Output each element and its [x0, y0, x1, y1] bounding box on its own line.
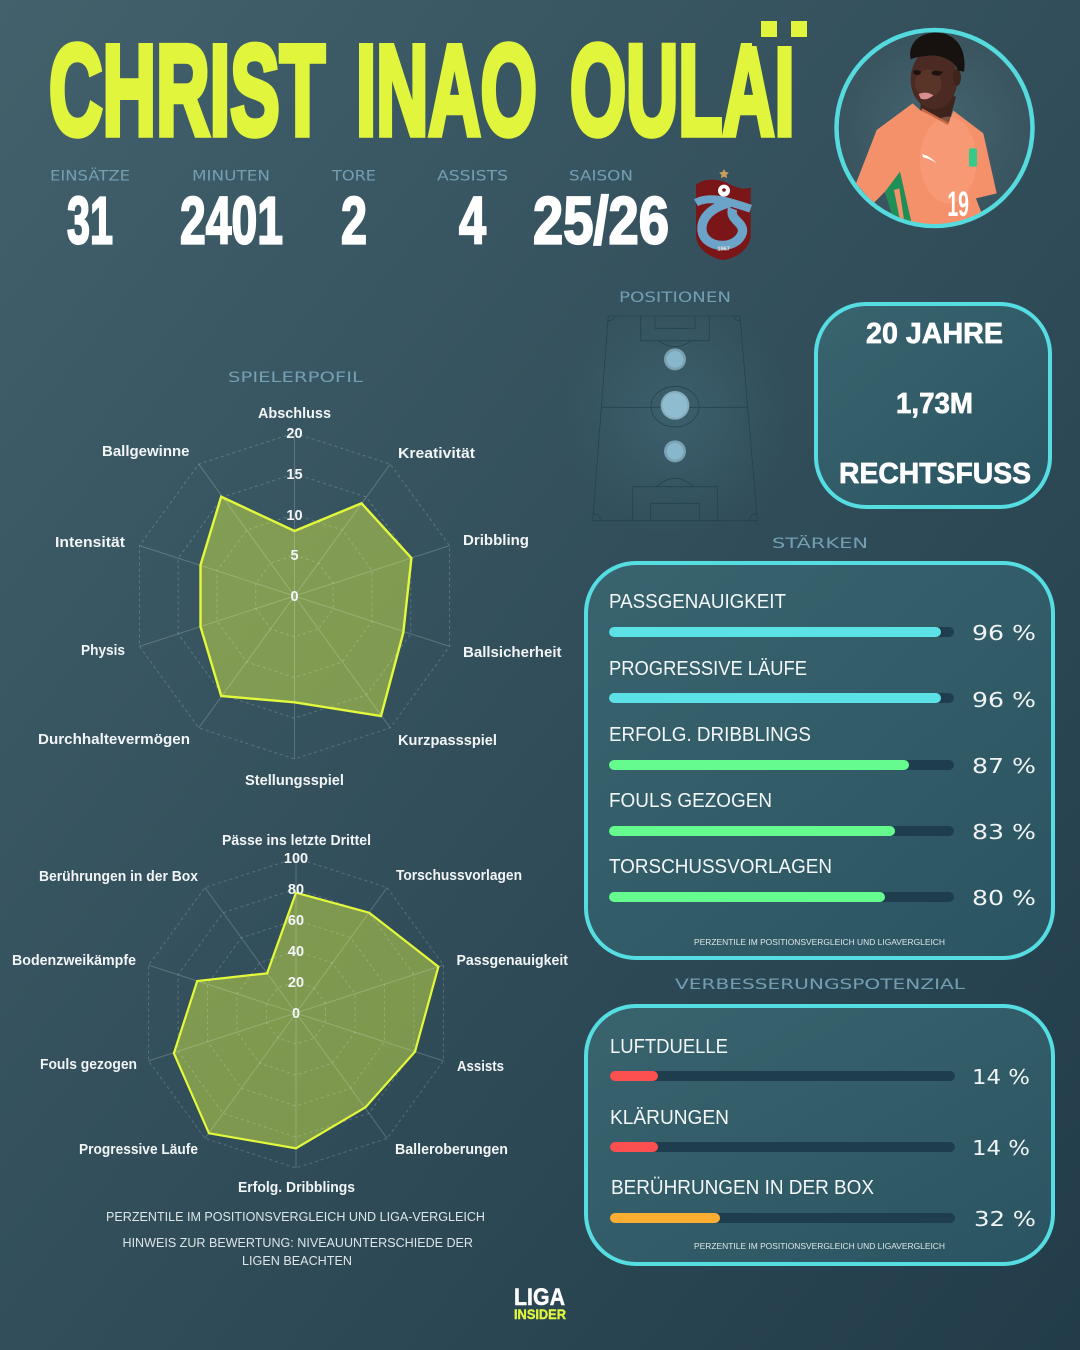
radar labels: Kreativität — [398, 446, 475, 462]
radar scale: 10 — [286, 508, 303, 524]
panel: player info — [816, 304, 1050, 507]
stat: Assists — [437, 168, 508, 258]
stat: Minuten — [180, 168, 283, 258]
logo: Liga Insider: LIGA — [514, 1284, 565, 1311]
radar scale: 0 — [290, 589, 299, 605]
note text: LIGEN BEACHTEN — [242, 1253, 352, 1268]
stat: Assists: 4 — [459, 184, 486, 258]
stat: Einsätze: 31 — [67, 184, 113, 258]
age: 20 JAHRE — [866, 318, 1003, 350]
bar: Passgenauigkeit: 96 % — [972, 621, 1036, 645]
bar: Erfolg. Dribblings: ERFOLG. DRIBBLINGS — [609, 724, 811, 746]
radar scale: 5 — [290, 548, 299, 564]
bar: Fouls gezogen — [609, 790, 1036, 844]
bar: Fouls gezogen: 83 % — [972, 820, 1036, 844]
bar: Berührungen in der Box: 32 % — [974, 1207, 1036, 1231]
bar: Luftduelle — [610, 1036, 1030, 1089]
radar labels: Ballgewinne — [102, 444, 190, 460]
position marker: defensive midfield — [664, 440, 686, 462]
radar labels: Torschussvorlagen — [396, 868, 522, 884]
icon: club crest: 1967 — [717, 247, 730, 253]
note text: HINWEIS ZUR BEWERTUNG: NIVEAUUNTERSCHIEDE DER — [122, 1235, 473, 1250]
stat: Assists: ASSISTS — [437, 168, 508, 184]
radar labels: Balleroberungen — [395, 1142, 508, 1158]
bar: Passgenauigkeit — [609, 591, 1036, 645]
stat: Tore — [331, 168, 376, 258]
stat: Einsätze: EINSÄTZE — [50, 166, 130, 184]
radar labels: Ballsicherheit — [463, 645, 562, 661]
heading: Positionen: POSITIONEN — [619, 290, 731, 306]
logo: Liga Insider: INSIDER — [514, 1306, 566, 1322]
foot: RECHTSFUSS — [839, 458, 1031, 490]
stat: Tore: 2 — [341, 184, 367, 258]
radar labels: Progressive Läufe — [79, 1142, 198, 1158]
title: CHRIST — [49, 20, 325, 162]
footnote: PERZENTILE IM POSITIONSVERGLEICH UND LIGAVERGLEICH — [694, 1241, 945, 1251]
position marker: attacking midfield — [664, 348, 686, 370]
radar labels: Abschluss — [258, 406, 331, 422]
bar: Luftduelle: LUFTDUELLE — [610, 1036, 728, 1058]
radar labels: Kurzpassspiel — [398, 733, 497, 749]
radar polygon — [200, 497, 411, 716]
radar scale: 20 — [288, 975, 304, 991]
heading: Verbesserungspotenzial: VERBESSERUNGSPOTENZIAL — [675, 977, 965, 993]
stat: Einsätze — [50, 166, 130, 258]
bar: Berührungen in der Box: BERÜHRUNGEN IN DER BOX — [611, 1177, 874, 1199]
title: OULAÏ — [570, 20, 796, 162]
radar scale: 100 — [284, 851, 308, 867]
radar labels: Fouls gezogen — [40, 1057, 137, 1073]
footnote: PERZENTILE IM POSITIONSVERGLEICH UND LIGAVERGLEICH — [694, 937, 945, 947]
radar labels: Erfolg. Dribblings — [238, 1180, 355, 1196]
radar labels — [38, 406, 562, 789]
bar: Klärungen: 14 % — [972, 1136, 1030, 1160]
title: INAO — [356, 20, 537, 162]
stat: Saison — [533, 168, 669, 258]
radar labels: Pässe ins letzte Drittel — [222, 833, 371, 849]
radar outline — [200, 497, 411, 716]
radar scale: 80 — [288, 882, 304, 898]
radar labels: Berührungen in der Box — [39, 869, 198, 885]
heading: Spielerprofil: SPIELERPOFIL — [228, 370, 363, 386]
radar labels — [12, 833, 568, 1196]
stat: Minuten: MINUTEN — [192, 168, 270, 184]
radar labels: Passgenauigkeit — [456, 953, 568, 969]
player portrait — [836, 30, 1032, 227]
heading: Stärken: STÄRKEN — [772, 534, 868, 552]
radar labels: Dribbling — [463, 533, 529, 549]
bar: Luftduelle: 14 % — [972, 1065, 1030, 1089]
radar chart: Spielerprofil — [38, 406, 562, 789]
radar scale: 40 — [288, 944, 304, 960]
bar: Klärungen: KLÄRUNGEN — [610, 1107, 729, 1129]
radar outline — [174, 893, 438, 1148]
bar: Torschussvorlagen: 80 % — [972, 886, 1036, 910]
player portrait: 19 — [947, 185, 969, 224]
radar scale — [284, 851, 308, 1022]
radar chart: Perzentile — [12, 833, 568, 1196]
radar labels: Durchhaltevermögen — [38, 732, 190, 748]
icon: club crest — [696, 169, 751, 260]
bar: Torschussvorlagen: TORSCHUSSVORLAGEN — [609, 856, 832, 878]
bar: Progressive Läufe: 96 % — [972, 688, 1036, 712]
radar labels: Assists — [457, 1059, 504, 1075]
radar scale: 60 — [288, 913, 304, 929]
note text: PERZENTILE IM POSITIONSVERGLEICH UND LIGA-VERGLEICH — [106, 1209, 485, 1224]
bar: Klärungen — [610, 1107, 1030, 1160]
bar: Torschussvorlagen — [609, 856, 1036, 910]
bar: Erfolg. Dribblings: 87 % — [972, 754, 1036, 778]
panel: Verbesserungspotenzial — [586, 1006, 1053, 1264]
pitch with positions — [562, 290, 788, 537]
radar labels: Stellungsspiel — [245, 773, 344, 789]
radar polygon — [174, 893, 438, 1148]
bar: Progressive Läufe — [609, 658, 1036, 712]
radar labels: Intensität — [55, 535, 125, 551]
bar: Berührungen in der Box — [610, 1177, 1036, 1231]
title — [50, 21, 807, 139]
bar: Fouls gezogen: FOULS GEZOGEN — [609, 790, 772, 812]
radar scale: 0 — [292, 1006, 300, 1022]
bar: Passgenauigkeit: PASSGENAUIGKEIT — [609, 591, 786, 613]
height: 1,73M — [896, 388, 973, 420]
stat: Minuten: 2401 — [180, 184, 283, 258]
radar labels: Physis — [81, 643, 125, 659]
radar labels: Bodenzweikämpfe — [12, 953, 136, 969]
stat: Saison: SAISON — [569, 168, 633, 184]
stat: Saison: 25/26 — [533, 184, 669, 258]
stat: Tore: TORE — [331, 168, 376, 184]
bar: Erfolg. Dribblings — [609, 724, 1036, 778]
panel: Stärken — [586, 563, 1053, 958]
note text — [106, 1209, 485, 1268]
bar: Progressive Läufe: PROGRESSIVE LÄUFE — [609, 658, 807, 680]
radar scale: 15 — [286, 467, 303, 483]
radar scale: 20 — [286, 426, 303, 442]
radar scale — [286, 426, 303, 605]
logo: Liga Insider — [514, 1284, 566, 1322]
position marker: central midfield — [661, 391, 689, 420]
